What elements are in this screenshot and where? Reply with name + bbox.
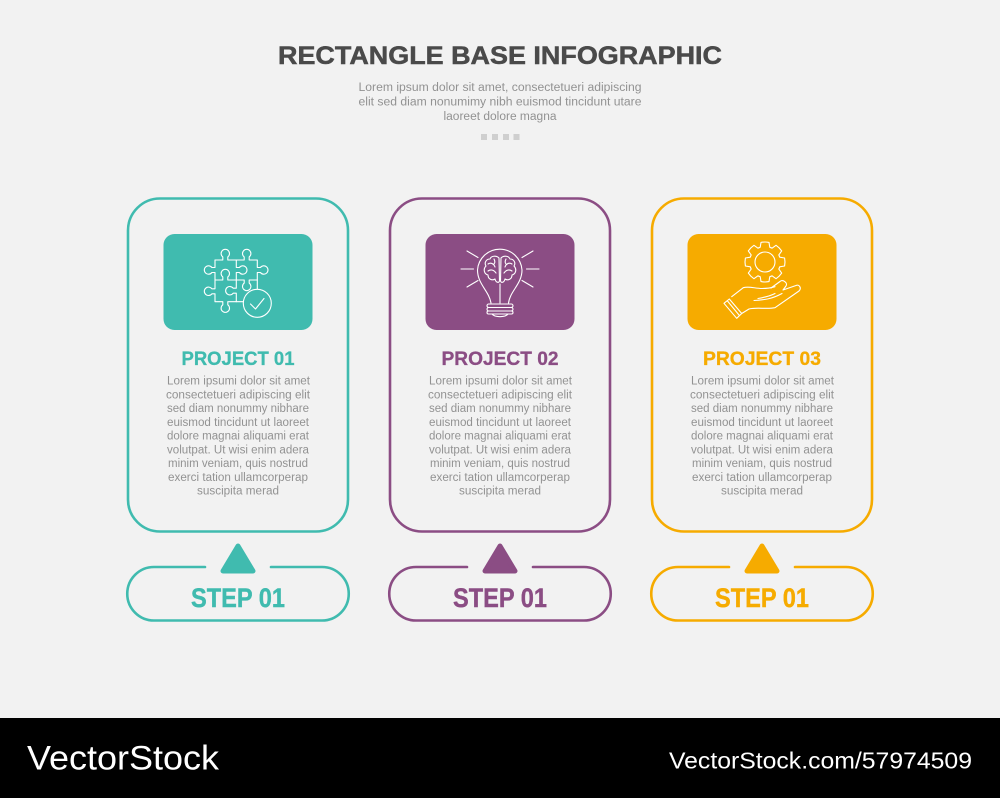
body text 03: minim veniam, quis nostrud bbox=[692, 458, 832, 470]
card outline 02 bbox=[390, 198, 610, 532]
body text 03: suscipita merad bbox=[721, 486, 803, 498]
body text 01: sed diam nonummy nibhare bbox=[167, 403, 309, 415]
footer bar bbox=[0, 718, 1000, 798]
body text 03: sed diam nonummy nibhare bbox=[691, 403, 833, 415]
body text 01: suscipita merad bbox=[197, 486, 279, 498]
body text 02: sed diam nonummy nibhare bbox=[429, 403, 571, 415]
arrow: triangle up 02 bbox=[485, 546, 515, 571]
heading: project 02: PROJECT 02 bbox=[442, 348, 559, 370]
icon: hand holding gear bbox=[688, 234, 836, 330]
panel: project 03 bbox=[652, 198, 872, 532]
step badge 01 bbox=[127, 546, 349, 620]
body text 01: minim veniam, quis nostrud bbox=[168, 458, 308, 470]
arrow: triangle up 03 bbox=[747, 546, 777, 571]
body text 02 bbox=[428, 376, 573, 498]
icon: puzzle with check mark bbox=[164, 234, 312, 330]
body text 03 bbox=[690, 376, 835, 498]
body text 01: dolore magnai aliquami erat bbox=[167, 430, 310, 442]
body text 03: exerci tation ullamcorperap bbox=[692, 472, 832, 484]
body text 02: volutpat. Ut wisi enim adera bbox=[429, 444, 572, 456]
body text 03: euismod tincidunt ut laoreet bbox=[691, 417, 834, 429]
step badge 03 bbox=[651, 546, 873, 620]
panel: project 01 bbox=[128, 198, 348, 532]
body text 03: consectetueri adipiscing elit bbox=[690, 389, 835, 401]
footer url text: VectorStock.com/57974509 bbox=[669, 748, 972, 774]
body text 02: Lorem ipsumi dolor sit amet bbox=[429, 376, 573, 388]
body text 01 bbox=[166, 376, 311, 498]
step label 02: STEP 01 bbox=[453, 583, 547, 613]
step badge 02 bbox=[389, 546, 611, 620]
card outline 01 bbox=[128, 198, 348, 532]
subtitle text: Lorem ipsum dolor sit amet, consectetueri adipiscing bbox=[358, 82, 642, 94]
body text 02: dolore magnai aliquami erat bbox=[429, 430, 572, 442]
card outline 03 bbox=[652, 198, 872, 532]
body text 02: suscipita merad bbox=[459, 486, 541, 498]
body text 01: consectetueri adipiscing elit bbox=[166, 389, 311, 401]
body text 03: dolore magnai aliquami erat bbox=[691, 430, 834, 442]
step label 01: STEP 01 bbox=[191, 583, 285, 613]
body text 01: exerci tation ullamcorperap bbox=[168, 472, 308, 484]
heading: project 03: PROJECT 03 bbox=[703, 348, 821, 370]
body text 02: euismod tincidunt ut laoreet bbox=[429, 417, 572, 429]
footer logo text: VectorStock bbox=[27, 740, 220, 778]
four dots ornament bbox=[481, 134, 520, 140]
body text 03: Lorem ipsumi dolor sit amet bbox=[691, 376, 835, 388]
body text 01: euismod tincidunt ut laoreet bbox=[167, 417, 310, 429]
body text 03: volutpat. Ut wisi enim adera bbox=[691, 444, 834, 456]
body text 02: minim veniam, quis nostrud bbox=[430, 458, 570, 470]
icon: light bulb with brain bbox=[426, 234, 574, 330]
step label 03: STEP 01 bbox=[715, 583, 809, 613]
heading: project 01: PROJECT 01 bbox=[182, 348, 295, 370]
subtitle text: laoreet dolore magna bbox=[444, 111, 557, 123]
subtitle text: elit sed diam nonumimy nibh euismod tincidunt utare bbox=[358, 96, 642, 108]
body text 02: exerci tation ullamcorperap bbox=[430, 472, 570, 484]
body text 01: volutpat. Ut wisi enim adera bbox=[167, 444, 310, 456]
subtitle text bbox=[358, 82, 642, 123]
arrow: triangle up 01 bbox=[223, 546, 253, 571]
body text 02: consectetueri adipiscing elit bbox=[428, 389, 573, 401]
title: RECTANGLE BASE INFOGRAPHIC bbox=[278, 42, 722, 70]
body text 01: Lorem ipsumi dolor sit amet bbox=[167, 376, 311, 388]
panel: project 02 bbox=[390, 198, 610, 532]
